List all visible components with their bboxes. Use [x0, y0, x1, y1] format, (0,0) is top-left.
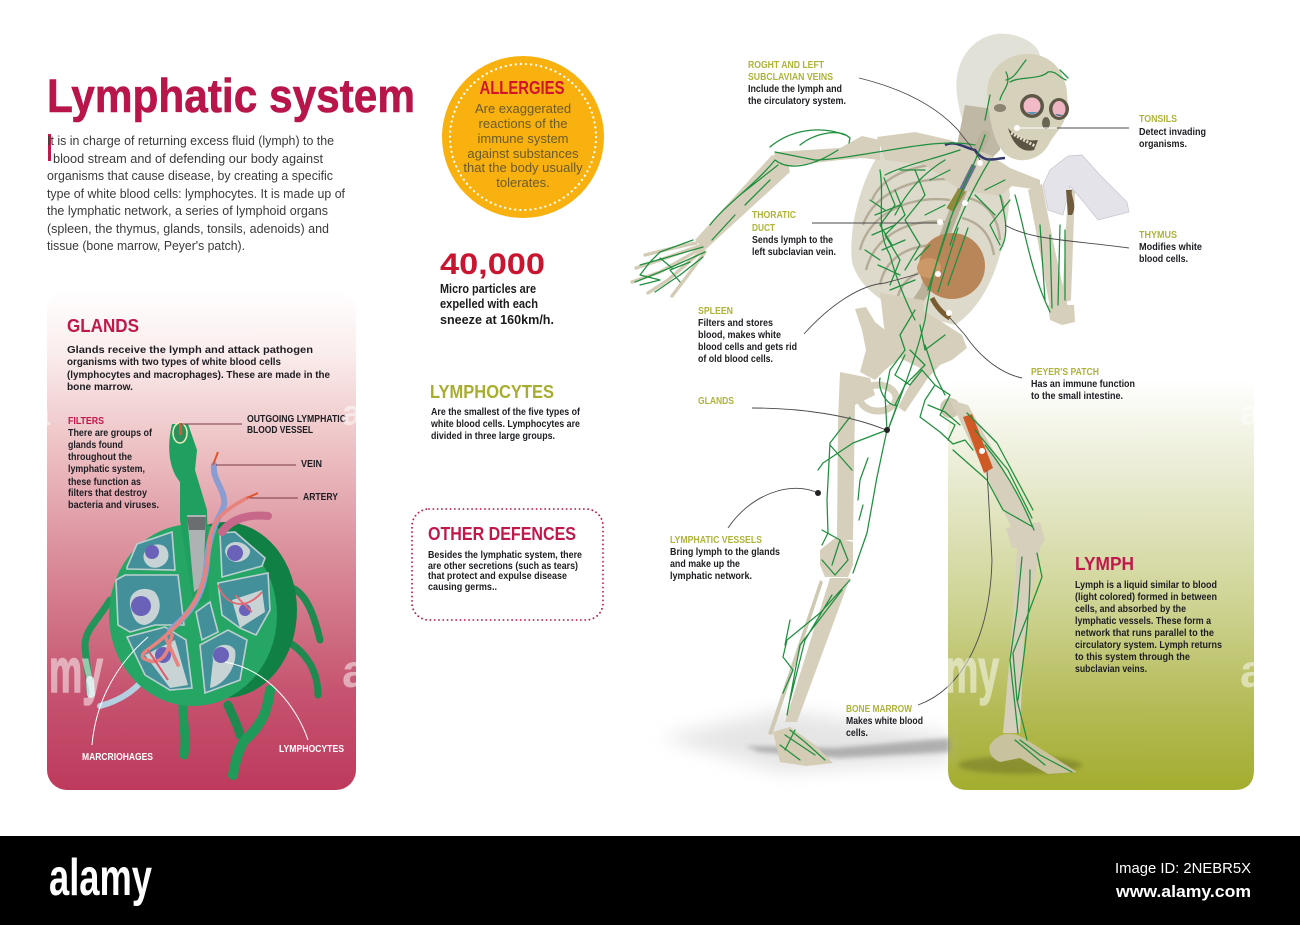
- skull: [987, 54, 1069, 160]
- allergies circle: that the body usually: [463, 160, 583, 175]
- gland labels: OUTGOING LYMPHATIC: [247, 413, 346, 425]
- label: subclavian veins: Include the lymph and: [748, 83, 842, 95]
- right foot: [989, 734, 1077, 774]
- label: tonsils: [1139, 113, 1206, 150]
- intro paragraph: tissue (bone marrow, Peyer's patch).: [47, 238, 245, 253]
- eye sockets: [1020, 94, 1044, 118]
- watermarks: a: [342, 392, 363, 433]
- label: thoratic duct: Sends lymph to the: [752, 234, 833, 246]
- statistic: 40,000: [440, 248, 554, 327]
- filters text: filters that destroy: [68, 487, 147, 499]
- nose: [1042, 117, 1050, 129]
- label: peyer's patch: PEYER'S PATCH: [1031, 366, 1099, 378]
- filters text: [68, 415, 159, 511]
- thoracic duct and subclavian veins: [945, 143, 1005, 210]
- lymphocytes text: divided in three large groups.: [431, 430, 555, 442]
- forearm: [695, 155, 790, 250]
- label: bone marrow: BONE MARROW: [846, 703, 912, 715]
- ribs: [860, 164, 1004, 300]
- alamy logo: alamy: [49, 849, 152, 907]
- neck: [955, 105, 1000, 175]
- label: tonsils: organisms.: [1139, 138, 1187, 150]
- other defences box: that protect and expulse disease: [428, 570, 567, 582]
- lobe nuclei: [131, 545, 251, 663]
- label: lymphatic vessels: [670, 534, 780, 582]
- lymph text: LYMPH: [1075, 554, 1134, 574]
- lymph text: to this system through the: [1075, 651, 1190, 663]
- second artery end: [222, 516, 268, 532]
- watermarks: [30, 392, 1266, 706]
- label: thoratic duct: THORATIC: [752, 209, 796, 221]
- tendrils: [85, 588, 320, 775]
- label: peyer's patch: Has an immune function: [1031, 378, 1135, 390]
- heading: glands: GLANDS: [67, 316, 139, 336]
- black footer: [0, 836, 1300, 925]
- statistic: 40,000: Micro particles are: [440, 281, 536, 296]
- lobes: [116, 532, 270, 693]
- label: spleen: of old blood cells.: [698, 353, 773, 365]
- watermarks: my: [49, 637, 103, 706]
- humerus: [770, 136, 880, 168]
- lead lines: [181, 423, 242, 425]
- glands description: (lymphocytes and macrophages). These are made in the: [67, 369, 330, 381]
- gland illustration: [85, 423, 320, 775]
- rib cage: [851, 145, 1010, 325]
- lead lines and dots: [728, 78, 1129, 705]
- lymphocytes text: white blood cells. Lymphocytes are: [430, 418, 580, 430]
- lumbar spine: [880, 293, 925, 335]
- lymph text: [1075, 554, 1222, 675]
- label: lymphatic vessels: Bring lymph to the glands: [670, 546, 780, 558]
- title: Lymphatic system: [47, 69, 415, 122]
- ghost head: [956, 34, 1040, 155]
- gland labels: VEIN: [301, 458, 322, 470]
- label: glands: GLANDS: [698, 395, 734, 407]
- label: thymus: [1139, 229, 1202, 265]
- filters text: bacteria and viruses.: [68, 499, 159, 511]
- torso vessels: [775, 133, 1065, 430]
- label: tonsils: Detect invading: [1139, 126, 1206, 138]
- watermarks: a: [30, 392, 51, 433]
- panel: lymph background: [948, 380, 1254, 790]
- label: bone marrow: cells.: [846, 727, 868, 739]
- filters text: these function as: [68, 476, 141, 488]
- other defences box: OTHER DEFENCES: [428, 524, 576, 544]
- glands description: Glands receive the lymph and attack pathogen: [67, 344, 313, 356]
- intro paragraph: organisms that cause disease, by creating a specific: [47, 168, 333, 183]
- statistic: 40,000: 40,000: [440, 248, 545, 281]
- label: thoratic duct: left subclavian vein.: [752, 246, 836, 258]
- stomach and spleen: [919, 233, 985, 299]
- filters text: glands found: [68, 439, 123, 451]
- green neck: [169, 424, 209, 605]
- ilium: [855, 307, 967, 412]
- left leg: [768, 372, 875, 766]
- filters text: throughout the: [68, 451, 132, 463]
- intro paragraph: the lymphatic network, a series of lymphoid organs: [47, 203, 328, 218]
- label: spleen: blood cells and gets rid: [698, 341, 797, 353]
- filters text: There are groups of: [68, 427, 152, 439]
- pelvis: [855, 307, 967, 412]
- front of node: [109, 524, 277, 706]
- skeleton figure: [632, 34, 1129, 774]
- watermarks: my: [945, 637, 999, 706]
- label: thoratic duct: [752, 209, 836, 258]
- watermarks: a: [342, 645, 368, 697]
- label: tonsils: TONSILS: [1139, 113, 1177, 125]
- other defences box: causing germs..: [428, 581, 497, 593]
- filters text: FILTERS: [68, 415, 104, 427]
- label: subclavian veins: [748, 59, 846, 107]
- label: spleen: Filters and stores: [698, 317, 773, 329]
- right arm: [1028, 184, 1075, 325]
- statistic: 40,000: expelled with each: [440, 296, 538, 311]
- filters text: lymphatic system,: [68, 463, 145, 475]
- lymph text: lymphatic vessels. These form a: [1075, 615, 1211, 627]
- intro paragraph: type of white blood cells: lymphocytes. It is made up of: [47, 186, 345, 201]
- label: thymus: Modifies white: [1139, 241, 1202, 253]
- lobe medulla: [130, 542, 265, 688]
- ground shadow: [660, 710, 1082, 774]
- intro paragraph: It is in charge of returning excess fluid (lymph) to the: [47, 133, 334, 148]
- panel: glands: [47, 290, 356, 790]
- handkerchief: [1043, 155, 1129, 220]
- allergies circle: tolerates.: [496, 175, 550, 190]
- intro paragraph: [47, 133, 345, 253]
- label: subclavian veins: SUBCLAVIAN VEINS: [748, 71, 833, 83]
- allergies circle: Are exaggerated: [475, 101, 571, 116]
- lymph text: subclavian veins.: [1075, 663, 1147, 675]
- intro paragraph: blood stream and of defending our body against: [53, 151, 323, 166]
- eyes: [1024, 98, 1040, 114]
- vein: [170, 465, 224, 630]
- statistic: 40,000: sneeze at 160km/h.: [440, 312, 554, 327]
- pelvic vessels: [880, 310, 973, 450]
- label: lymphatic vessels: lymphatic network.: [670, 570, 752, 582]
- website: www.alamy.com: [1115, 882, 1251, 901]
- left foot: [773, 727, 833, 766]
- allergies circle: against substances: [467, 146, 579, 161]
- right leg: [940, 398, 1077, 774]
- lymph text: (light colored) formed in between: [1075, 591, 1217, 603]
- label: bone marrow: [846, 703, 923, 739]
- other defences box: are other secretions (such as tears): [428, 560, 578, 572]
- other defences box: [412, 509, 603, 620]
- label: spleen: blood, makes white: [698, 329, 781, 341]
- glands description: [67, 344, 330, 393]
- spine: [905, 135, 985, 320]
- lymphocytes text: [430, 382, 580, 442]
- lymphocytes text: Are the smallest of the five types of: [431, 406, 580, 418]
- watermarks: a: [1240, 645, 1266, 697]
- allergies circle: ALLERGIES: [480, 78, 564, 98]
- lymph text: circulatory system. Lymph returns: [1075, 639, 1222, 651]
- gland labels: LYMPHOCYTES: [279, 743, 344, 755]
- leg vessels: [780, 413, 1072, 772]
- label: spleen: [698, 305, 797, 365]
- pubic ring: [860, 385, 896, 411]
- lymph text: cells, and absorbed by the: [1075, 603, 1186, 615]
- lymphocytes text: LYMPHOCYTES: [430, 382, 554, 402]
- gland labels: BLOOD VESSEL: [247, 424, 313, 436]
- gland labels: MARCRIOHAGES: [82, 751, 153, 763]
- allergies circle: reactions of the: [479, 116, 567, 131]
- label: thymus: THYMUS: [1139, 229, 1177, 241]
- label: bone marrow: Makes white blood: [846, 715, 923, 727]
- glands description: bone marrow.: [67, 381, 133, 393]
- allergies circle: [442, 56, 604, 218]
- label: peyer's patch: to the small intestine.: [1031, 390, 1123, 402]
- label: subclavian veins: ROGHT AND LEFT: [748, 59, 824, 71]
- lymph text: Lymph is a liquid similar to blood: [1075, 579, 1217, 591]
- cranium vessels: [985, 60, 1068, 120]
- intro paragraph: (spleen, the thymus, glands, tonsils, adenoids) and: [47, 221, 329, 236]
- lymph text: network that runs parallel to the: [1075, 627, 1214, 639]
- arm vessels: [635, 130, 845, 292]
- label: peyer's patch: [1031, 366, 1135, 402]
- other defences box: Besides the lymphatic system, there: [428, 549, 582, 561]
- label: thymus: blood cells.: [1139, 253, 1188, 265]
- scapula and shoulder girdle: [877, 132, 1040, 196]
- gland labels: ARTERY: [303, 491, 338, 503]
- watermarks: a: [1240, 392, 1261, 433]
- inner tube: [187, 515, 206, 592]
- left arm: [632, 136, 880, 296]
- back of node: [153, 522, 297, 698]
- label: lymphatic vessels: and make up the: [670, 558, 740, 570]
- image id: Image ID: 2NEBR5X: [1115, 860, 1251, 877]
- artery: [142, 498, 247, 665]
- gland labels: [82, 413, 346, 763]
- label: spleen: SPLEEN: [698, 305, 733, 317]
- label: subclavian veins: the circulatory system.: [748, 95, 846, 107]
- allergies circle: immune system: [477, 131, 569, 146]
- glands description: organisms with two types of white blood cells: [67, 356, 281, 368]
- label: lymphatic vessels: LYMPHATIC VESSELS: [670, 534, 762, 546]
- hand: [632, 243, 705, 296]
- label: thoratic duct: DUCT: [752, 222, 775, 234]
